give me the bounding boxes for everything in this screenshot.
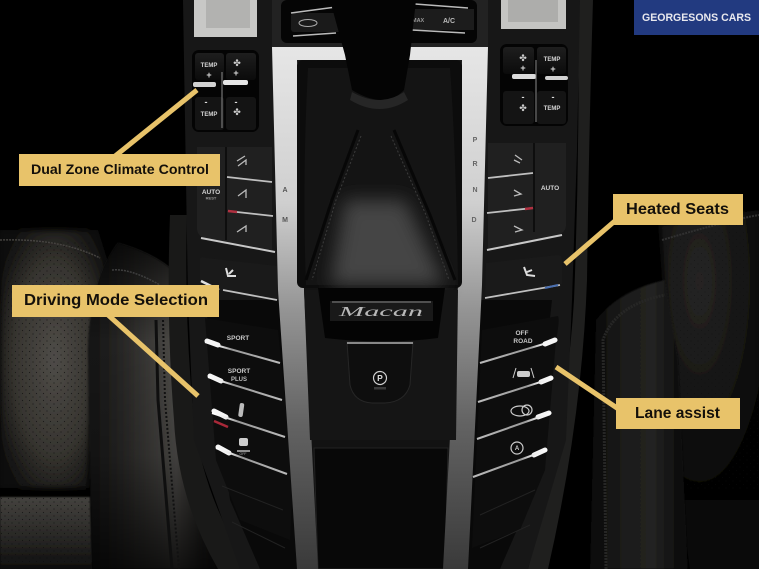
left driving mode buttons [205,318,293,548]
right temperature switches: ✤ [519,103,527,113]
silver trim frame: A [282,187,288,194]
logo: Georgesons Cars: GEORGESONS CARS [642,12,751,24]
label: heated seats [613,194,743,225]
Macan badge panel [304,288,458,440]
right seat [528,0,759,569]
left temperature switches: - [234,97,238,107]
label: driving mode selection [12,285,219,317]
left temperature switches: ✤ [233,107,241,117]
right driving mode buttons: A [515,446,520,452]
left seat [0,215,250,569]
left seat ventilation buttons: REST [206,196,217,200]
Macan badge panel: Macan [337,305,423,320]
left driving mode buttons: SPORT [228,368,250,375]
label: driving mode selection: Driving Mode Selection [24,292,208,309]
label: lane assist [616,398,740,429]
left temperature switches: TEMP [201,112,217,118]
logo: Georgesons Cars [634,0,759,35]
right heated seat button [485,255,562,298]
left temperature switches: + [206,70,212,80]
left seat ventilation buttons [197,147,275,252]
parking brake button [347,342,413,403]
silver trim frame: R [472,161,478,168]
silver trim frame: P [473,137,478,144]
right seat ventilation buttons [487,143,566,250]
right temperature switches: + [520,63,526,73]
silver trim frame: N [472,187,478,194]
left temperature switches: + [233,68,239,78]
callout line: climate [114,90,197,157]
right temperature switches: - [552,92,554,102]
left temperature switches [192,50,259,132]
left temperature switches: ✤ [233,58,241,68]
right temperature switches: TEMP [544,57,560,63]
centre console body [183,0,580,569]
gear lever boot [297,60,462,288]
right temperature switches: + [550,64,556,74]
silver trim frame: D [471,217,477,224]
right temperature switches: - [522,92,524,102]
left temperature switches: - [204,97,208,107]
top centre climate buttons: MAX [412,18,425,24]
right temperature switches: TEMP [544,106,560,112]
centre lower panel [304,288,458,569]
right driving mode buttons: ROAD [513,338,533,345]
label: heated seats: Heated Seats [626,201,729,218]
parking brake button: P [377,373,383,383]
label: lane assist: Lane assist [635,405,721,422]
left driving mode buttons: SPORT [227,335,249,342]
top centre climate buttons: A/C [443,18,455,25]
gear knob [330,0,416,109]
left driving mode buttons: OFF [240,452,246,456]
right temperature switches: ✤ [519,53,527,63]
top centre climate buttons [272,0,488,50]
label: dual zone climate control [19,154,220,186]
label: dual zone climate control: Dual Zone Climate Control [31,161,209,177]
callout line: heated seats [565,220,616,264]
left driving mode buttons: PLUS [231,377,247,383]
right driving mode buttons: OFF [516,330,529,337]
right temperature switches [500,44,568,126]
right display screen [501,0,566,29]
callout line: lane assist [556,367,620,410]
left heated seat button [200,257,277,300]
callout line: driving mode [107,314,198,396]
left temperature switches: TEMP [201,63,217,69]
silver trim frame: M [282,217,288,224]
silver trim frame [272,47,488,569]
right seat ventilation buttons: AUTO [541,185,559,192]
left seat ventilation buttons: AUTO [202,189,220,196]
right driving mode buttons [472,316,559,548]
left display screen [194,0,257,37]
